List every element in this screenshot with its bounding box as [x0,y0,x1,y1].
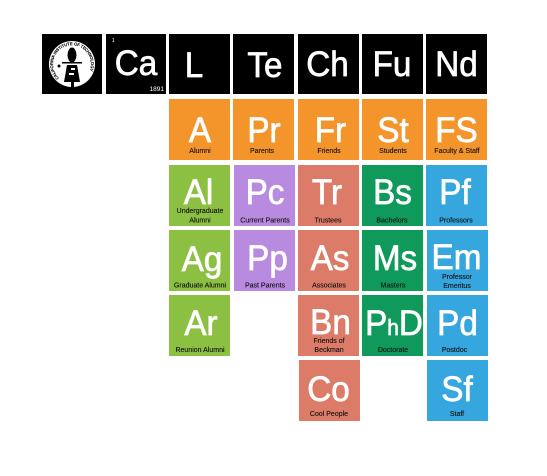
tile: PhD Doctorate: PhD [365,304,423,343]
tile: Pc Current Parents [234,165,295,226]
tile: As Associates: Associates [312,282,346,290]
seal ring text: CALIFORNIA INSTITUTE OF TECHNOLOGY [50,42,94,80]
tile: Nd: Nd [435,45,478,84]
tile: Ca: Ca [115,44,157,83]
tile: Ag Graduate Alumni: Ag [182,240,222,279]
tile: Sf Staff [427,360,488,421]
tile: Pp Past Parents: Past Parents [245,282,286,290]
tile: Bn Friends of Beckman: Bn [310,303,351,342]
tile: Em Professor Emeritus [427,230,488,291]
tile: Pf Professors [426,165,487,226]
tile: Ar Reunion Alumni [169,295,230,356]
tile: Pf Professors: Pf [439,173,471,212]
tile: Ms Masters: Masters [381,282,406,290]
tile: Sf Staff: Staff [450,411,464,418]
tile: Bs Bachelors: Bs [373,173,412,212]
tile: Pc Current Parents: Current Parents [240,218,290,224]
tile: Pd Postdoc: Pd [437,304,478,343]
tile: Fu [362,34,423,94]
tile: Co Cool People: Cool People [310,411,348,418]
tile: Pr Parents [233,99,294,160]
tile: Te [233,34,294,94]
tile: Tr Trustees: Tr [312,173,342,212]
tile: Tr Trustees: Trustees [315,218,342,224]
tile: Bs Bachelors: Bachelors [376,218,408,224]
tile: PhD Doctorate: Doctorate [378,347,408,354]
tile: Ar Reunion Alumni: Reunion Alumni [175,347,225,354]
tile: St Students: Students [379,148,407,155]
tile: Al Undergraduate Alumni [169,165,230,226]
tile: Bn Friends of Beckman: Beckman [314,347,344,354]
tile: Pp Past Parents: Pp [247,239,288,278]
tile: Ag Graduate Alumni [169,230,230,291]
tile: Bs Bachelors [362,165,423,226]
tile: Pp Past Parents [234,230,295,291]
tile: Bn Friends of Beckman: Friends of [313,338,345,345]
tile: Pd Postdoc [427,295,488,356]
tile: Pr Parents: Parents [250,148,275,155]
tile: Tr Trustees [298,165,359,226]
tile: As Associates [298,230,359,291]
tile: Ch [298,34,359,94]
tile: Fr Friends: Fr [315,111,346,150]
tile: Ar Reunion Alumni: Ar [184,304,218,343]
tile: St Students [362,99,423,160]
tile: Al Undergraduate Alumni: Undergraduate [177,208,223,215]
tile: Pc Current Parents: Pc [246,173,284,212]
tile: Al Undergraduate Alumni: Al [184,173,213,212]
tile: Nd [426,34,487,94]
tile: seal logo [42,34,102,94]
tile: Fr Friends [298,99,359,160]
tile: St Students: St [377,111,409,150]
seal torch [58,48,82,88]
tile: Em Professor Emeritus: Professor [442,274,473,281]
tile: Ag Graduate Alumni: Graduate Alumni [174,282,227,290]
tile: FS Faculty and Staff [426,99,487,160]
tile: Pr Parents: Pr [247,111,281,150]
tile: Ms Masters: Ms [373,239,417,278]
tile: Pd Postdoc: Postdoc [442,347,468,354]
tile: L [169,34,230,94]
tile: PhD Doctorate [362,295,423,356]
tile: Te: Te [247,46,283,85]
tile: Fu: Fu [373,45,411,84]
tile: Ca [106,34,166,94]
tile: A Alumni: A [189,111,211,150]
tile: Bn Friends of Beckman [298,295,359,356]
tile: Al Undergraduate Alumni: Alumni [189,218,211,224]
tile: Ch: Ch [306,45,349,84]
tile: Pf Professors: Professors [439,218,473,224]
tile: Ca: 1 [112,38,115,44]
tile: Ca: 1891 [150,86,164,93]
tile: Em Professor Emeritus: Em [432,238,481,277]
tile: Ms Masters [362,230,423,291]
tile: Sf Staff: Sf [441,370,473,409]
tile: Co Cool People: Co [307,370,350,409]
tile: FS Faculty and Staff: Faculty & Staff [434,148,480,155]
tile: FS Faculty and Staff: FS [435,111,478,150]
tile: Co Cool People [299,360,360,421]
tile: A Alumni [169,99,230,160]
tile: As Associates: As [311,239,349,278]
tile: Fr Friends: Friends [317,148,341,155]
tile: L: L [185,46,203,85]
tile: Em Professor Emeritus: Emeritus [443,283,471,290]
tile: A Alumni: Alumni [189,148,211,155]
